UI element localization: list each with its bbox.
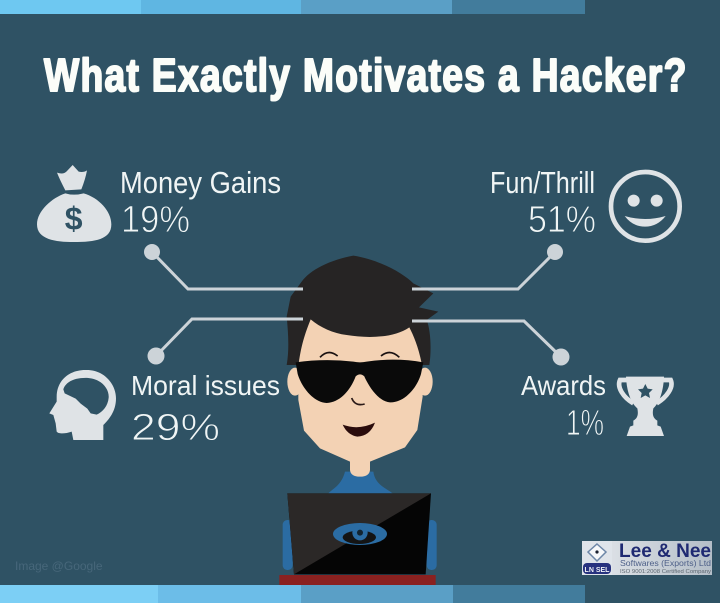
laptop logo: eye — [333, 523, 387, 545]
top colour bar — [0, 0, 585, 14]
title: What Exactly Motivates a Hacker? — [44, 49, 686, 101]
value: 1%: 1% — [566, 402, 604, 443]
item: moral issues — [49, 370, 280, 449]
hacker arms — [283, 520, 437, 570]
label: moral issues: Moral issues — [131, 370, 280, 401]
shirt — [328, 472, 393, 493]
face — [298, 319, 423, 462]
image credit: Image @Google — [15, 559, 103, 573]
value: 19%: 19% — [121, 199, 190, 241]
icon: smiley — [611, 172, 680, 241]
ears — [287, 368, 433, 396]
value: 51%: 51% — [528, 199, 596, 241]
logo certification: ISO 9001:2008 Certified Company — [620, 569, 711, 575]
label: awards: Awards — [521, 370, 606, 401]
connector lines — [152, 252, 561, 357]
label: fun/thrill: Fun/Thrill — [490, 165, 595, 200]
logo name: Lee & Nee — [619, 541, 711, 562]
icon: trophy — [619, 377, 671, 436]
hacker character — [279, 256, 438, 585]
value: 29%: 29% — [131, 407, 220, 449]
item: money gains — [37, 165, 281, 242]
laptop lid — [287, 493, 431, 574]
item: fun/thrill — [490, 165, 680, 241]
eyebrows — [320, 352, 399, 357]
mouth — [343, 423, 375, 437]
sunglasses — [296, 360, 423, 403]
hair back — [287, 256, 438, 365]
icon: head with brain — [49, 370, 116, 440]
label: money gains: Money Gains — [120, 165, 281, 200]
bottom colour bar — [0, 585, 585, 603]
item: awards — [521, 370, 671, 443]
connector: fun/thrill — [412, 252, 555, 289]
connector: money gains — [152, 252, 303, 289]
logo subtitle: Softwares (Exports) Ltd — [620, 558, 711, 568]
icon: money bag: $ — [65, 201, 83, 237]
connector end dots — [144, 244, 570, 366]
icon: money bag — [37, 165, 111, 242]
logo emblem: LN SEL — [585, 567, 610, 574]
logo background — [582, 541, 712, 575]
connector: moral issues — [156, 319, 303, 356]
nose — [352, 398, 365, 405]
company logo — [582, 541, 712, 575]
neck — [350, 453, 370, 477]
connector: awards — [412, 321, 561, 357]
laptop base — [279, 575, 436, 585]
